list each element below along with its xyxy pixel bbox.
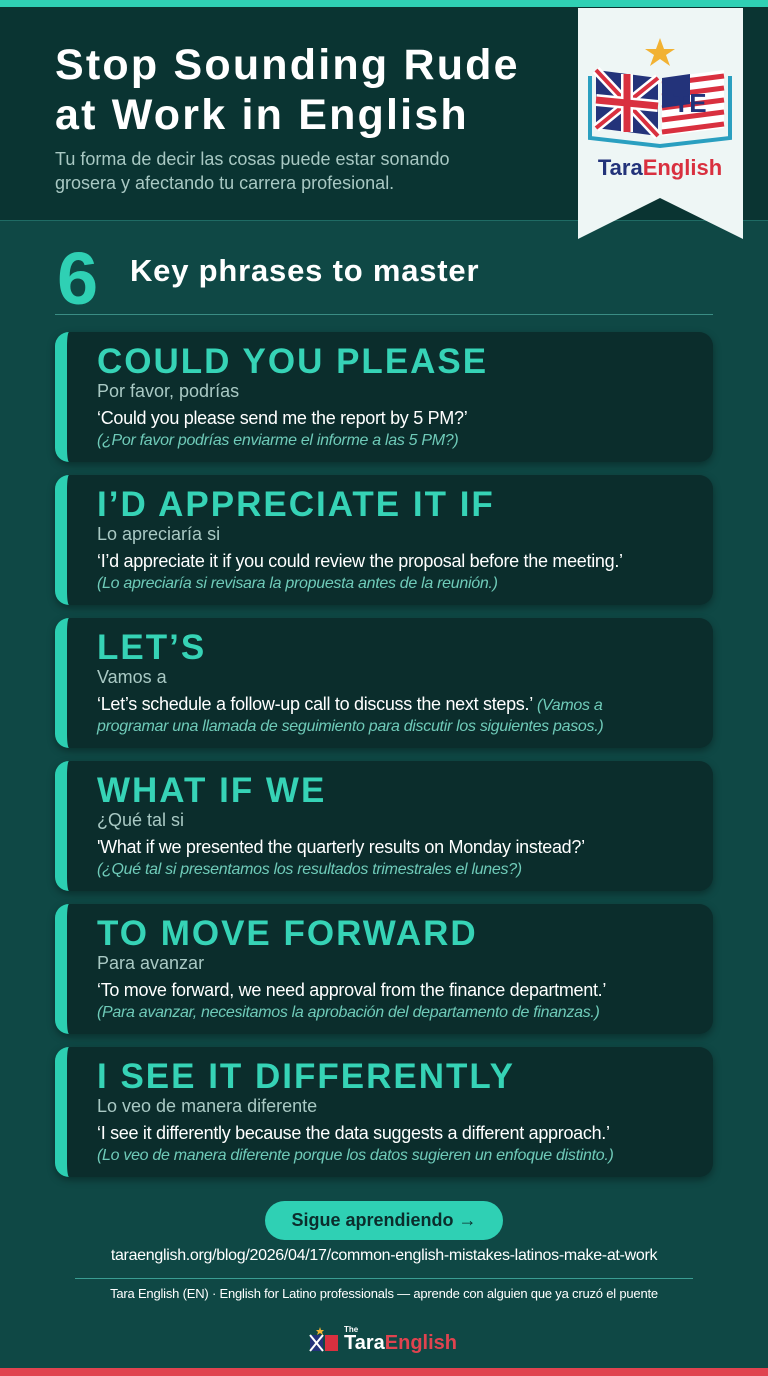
card 6: Lo veo de manera diferente (97, 1096, 317, 1116)
card 1 (55, 332, 713, 462)
logo banner: TE (673, 88, 707, 118)
footer logo: The (344, 1325, 358, 1334)
footer logo (309, 1325, 457, 1354)
card 1: (¿Por favor podrías enviarme el informe a las 5 PM?) (97, 432, 458, 449)
card 1: ‘Could you please send me the report by 5 PM?’ (97, 408, 467, 428)
card 2: Lo apreciaría si (97, 524, 220, 544)
card 6: ‘I see it differently because the data suggests a different approach.’ (97, 1123, 610, 1143)
card 6: I SEE IT DIFFERENTLY (97, 1057, 515, 1096)
card 3: ‘Let’s schedule a follow-up call to discuss the next steps.’ (Vamos a (97, 694, 602, 714)
header panel (0, 7, 768, 221)
footer logo: TaraEnglish (344, 1332, 457, 1354)
subtitle: Tu forma de decir las cosas puede estar sonando (55, 149, 450, 169)
subtitle: grosera y afectando tu carrera profesional. (55, 173, 394, 193)
title: Stop Sounding Rude (55, 41, 520, 89)
card 4: (¿Qué tal si presentamos los resultados trimestrales el lunes?) (97, 861, 522, 878)
card 3: LET’S (97, 628, 206, 667)
title: at Work in English (55, 91, 469, 139)
card 3: Vamos a (97, 667, 167, 687)
bottom stripe (0, 1368, 768, 1376)
url: taraenglish.org/blog/2026/04/17/common-english-mistakes-latinos-make-at-work (111, 1247, 657, 1264)
logo banner: TaraEnglish (598, 155, 722, 180)
section heading (57, 237, 479, 320)
card 1: Por favor, podrías (97, 381, 239, 401)
card 1: COULD YOU PLEASE (97, 342, 488, 381)
card 4: WHAT IF WE (97, 771, 326, 810)
card 6: (Lo veo de manera diferente porque los datos sugieren un enfoque distinto.) (97, 1147, 614, 1164)
logo banner (578, 8, 743, 239)
top stripe (0, 0, 768, 7)
button (265, 1201, 503, 1240)
button: Sigue aprendiendo → (291, 1210, 477, 1230)
card 5: ‘To move forward, we need approval from the finance department.’ (97, 980, 606, 1000)
card 2: (Lo apreciaría si revisara la propuesta antes de la reunión.) (97, 575, 498, 592)
card 2: ‘I’d appreciate it if you could review the proposal before the meeting.’ (97, 551, 623, 571)
card 2: I’D APPRECIATE IT IF (97, 485, 495, 524)
card 6 (55, 1047, 713, 1177)
card 5: Para avanzar (97, 953, 204, 973)
card 5 (55, 904, 713, 1034)
big number: 6 (57, 237, 98, 320)
card 4 (55, 761, 713, 891)
card 4: 'What if we presented the quarterly results on Monday instead?’ (97, 837, 585, 857)
heading text: Key phrases to master (130, 253, 479, 288)
card 3: programar una llamada de seguimiento para discutir los siguientes pasos.) (97, 718, 603, 735)
footer text: Tara English (EN) · English for Latino professionals — aprende con alguien que ya cruzó el puente (110, 1286, 658, 1301)
card 3 (55, 618, 713, 748)
card 2 (55, 475, 713, 605)
title (55, 41, 520, 139)
subtitle (55, 149, 450, 193)
card 5: TO MOVE FORWARD (97, 914, 478, 953)
card 5: (Para avanzar, necesitamos la aprobación del departamento de finanzas.) (97, 1004, 600, 1021)
card 4: ¿Qué tal si (97, 810, 184, 830)
